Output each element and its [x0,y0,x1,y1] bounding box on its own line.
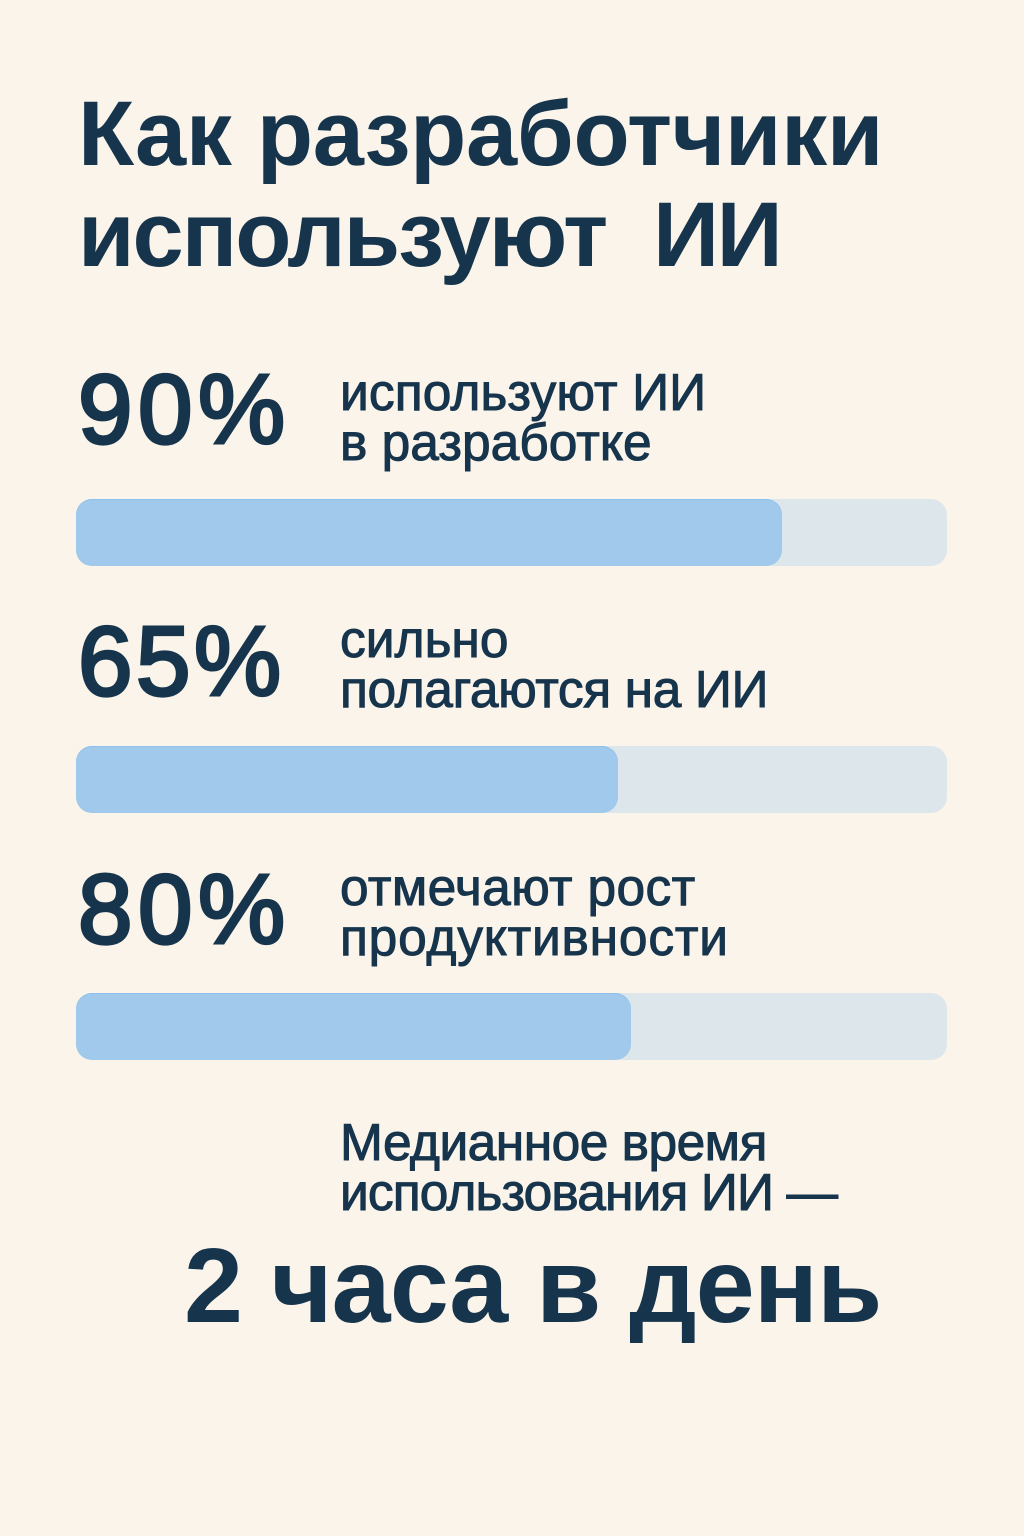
progress bar 80% [76,993,947,1060]
median time value: 2 часа в день [184,1227,882,1345]
median time label: использования ИИ — [340,1163,837,1221]
stat value 65%: 65% [78,606,285,716]
stat label 65% [340,610,768,718]
progress bar 65% [76,746,947,813]
stat row: 80% [76,854,947,1060]
median time label [340,1113,838,1221]
stat label 90% [340,363,706,472]
stat label 65%: полагаются на ИИ [340,660,768,718]
title: используют [78,184,606,286]
stat row: 65% [76,606,947,813]
title: Как разработчики [78,83,883,185]
stat label 90%: используют ИИ [340,363,706,421]
stat row: 90% [76,354,947,566]
stat label 65%: сильно [340,610,508,668]
stat label 80% [340,858,729,966]
stat value 90%: 90% [78,354,291,464]
progress bar 90% [76,499,947,566]
stat label 80%: продуктивности [340,908,729,966]
stat label 80%: отмечают рост [340,858,696,916]
title [78,83,883,286]
stat value 80%: 80% [78,854,291,964]
title: ИИ [653,184,780,286]
median time label: Медианное время [340,1113,767,1171]
stat label 90%: в разработке [340,413,652,471]
